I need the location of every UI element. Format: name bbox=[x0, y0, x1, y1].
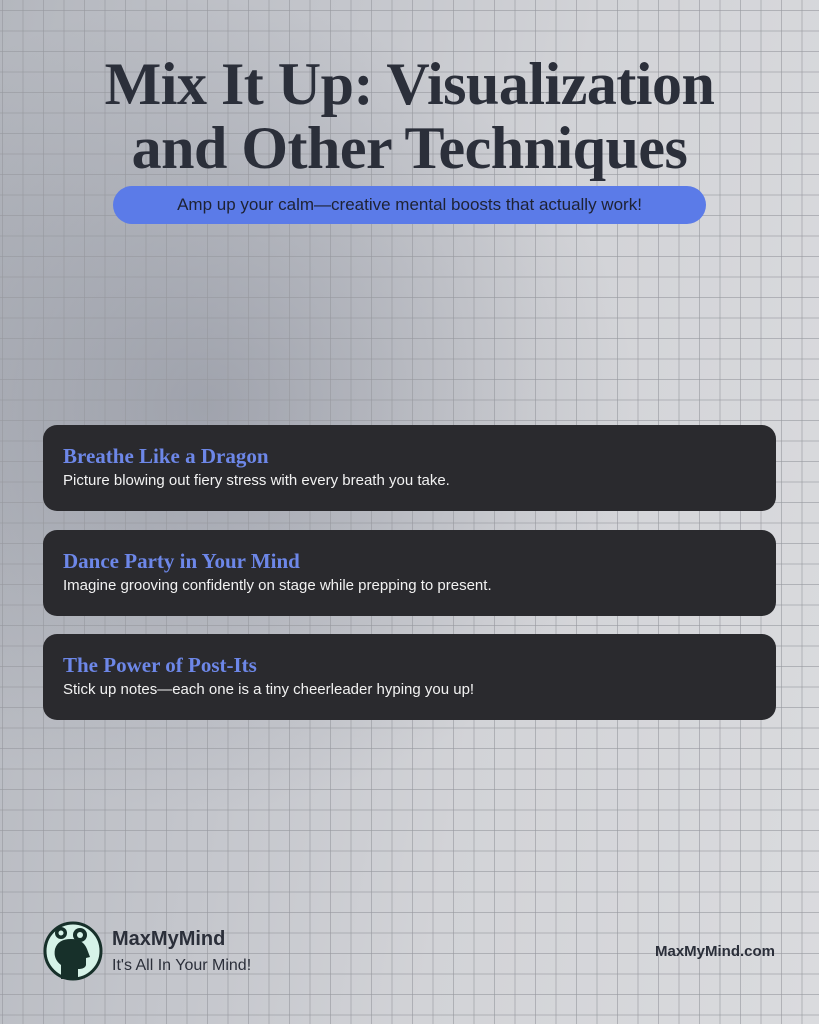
card: breathe like a dragon: Breathe Like a Dragon bbox=[63, 444, 269, 468]
card: breathe like a dragon bbox=[43, 425, 776, 511]
logo icon bbox=[44, 922, 102, 980]
card: post-its: Stick up notes—each one is a tiny cheerleader hyping you up! bbox=[63, 681, 474, 698]
website: MaxMyMind.com bbox=[655, 943, 775, 960]
title bbox=[105, 51, 714, 181]
card: dance party: Imagine grooving confidently on stage while prepping to present. bbox=[63, 577, 492, 594]
title: Mix It Up: Visualization bbox=[105, 51, 714, 117]
subtitle pill: Amp up your calm—creative mental boosts that actually work! bbox=[177, 195, 642, 214]
card: post-its: The Power of Post-Its bbox=[63, 653, 257, 677]
subtitle pill bbox=[113, 186, 706, 224]
title: and Other Techniques bbox=[132, 115, 687, 181]
brand name: MaxMyMind bbox=[112, 928, 225, 950]
card: breathe like a dragon: Picture blowing out fiery stress with every breath you take. bbox=[63, 472, 450, 489]
tagline: It's All In Your Mind! bbox=[112, 957, 251, 974]
card: dance party bbox=[43, 530, 776, 616]
card: post-its bbox=[43, 634, 776, 720]
card: dance party: Dance Party in Your Mind bbox=[63, 549, 300, 573]
